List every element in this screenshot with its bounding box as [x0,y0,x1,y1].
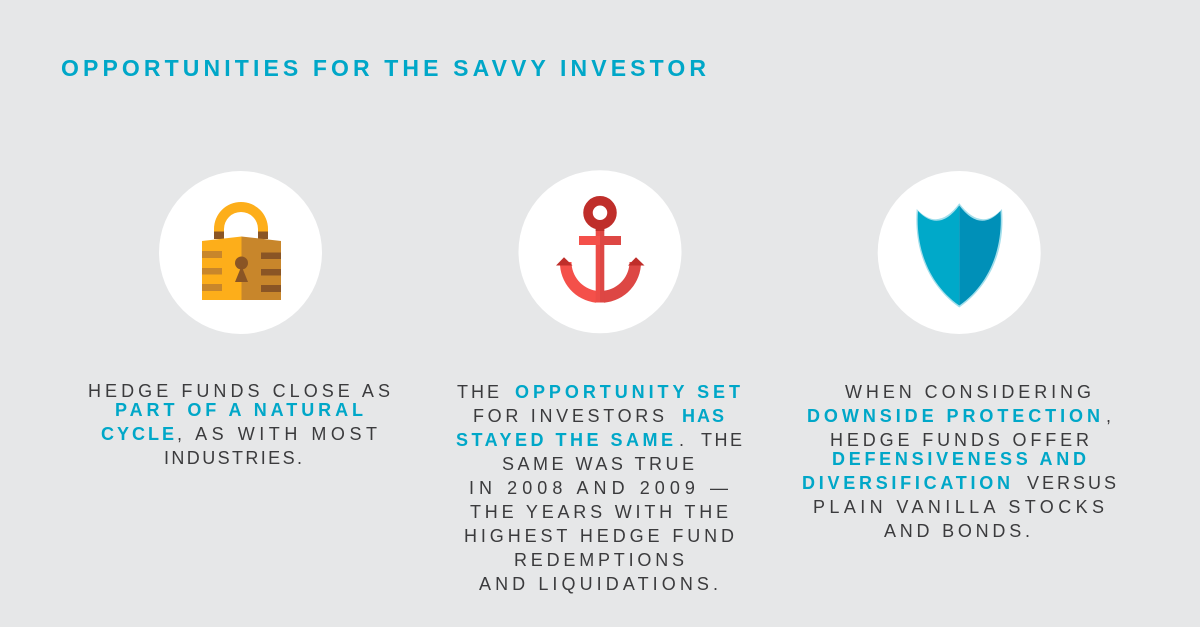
icon: shield [878,171,1041,334]
text block: anchor caption [456,382,742,594]
text block: lock caption: INDUSTRIES. [164,448,302,468]
text block: lock caption: CYCLE [101,424,174,444]
text block: shield caption: HEDGE FUNDS OFFER [830,430,1089,450]
panel: anchor column [456,170,742,594]
text block: lock caption: PART OF A NATURAL [115,400,363,420]
text block: anchor caption: THE YEARS WITH THE [470,502,728,522]
text block: shield caption [802,382,1116,541]
text block: anchor caption: THE [457,382,499,402]
text block: anchor caption: . [679,430,684,450]
text block: shield caption: PLAIN VANILLA STOCKS [813,497,1104,517]
text block: anchor caption: FOR INVESTORS [473,406,664,426]
text block: shield caption: AND BONDS. [884,521,1030,541]
text block: anchor caption: THE [701,430,742,450]
text block: shield caption: , [1106,406,1111,426]
text block: shield caption: DOWNSIDE PROTECTION [807,406,1100,426]
text block: anchor caption: HAS [682,406,724,426]
text block: shield caption: DEFENSIVENESS AND [832,449,1086,469]
text block: lock caption: HEDGE FUNDS CLOSE AS [88,381,390,401]
text block: lock caption: , AS WITH MOST [177,424,377,444]
text block: shield caption: VERSUS [1027,473,1116,493]
text block: anchor caption: STAYED THE SAME [456,430,673,450]
text block: anchor caption: IN 2008 AND 2009 — [469,478,728,498]
text block: anchor caption: REDEMPTIONS [514,550,684,570]
text block: anchor caption: AND LIQUIDATIONS. [479,574,718,594]
text block: lock caption [88,381,390,468]
panel: shield column [802,171,1116,541]
text block: anchor caption: SAME WAS TRUE [502,454,694,474]
text block: anchor caption: OPPORTUNITY SET [515,382,740,402]
icon: padlock [159,171,322,334]
text block: anchor caption: HIGHEST HEDGE FUND [464,526,734,546]
title: OPPORTUNITIES FOR THE SAVVY INVESTOR [61,55,706,81]
text block: shield caption: WHEN CONSIDERING [845,382,1091,402]
text block: shield caption: DIVERSIFICATION [802,473,1010,493]
panel: lock column [88,171,390,468]
icon: anchor [518,170,682,333]
